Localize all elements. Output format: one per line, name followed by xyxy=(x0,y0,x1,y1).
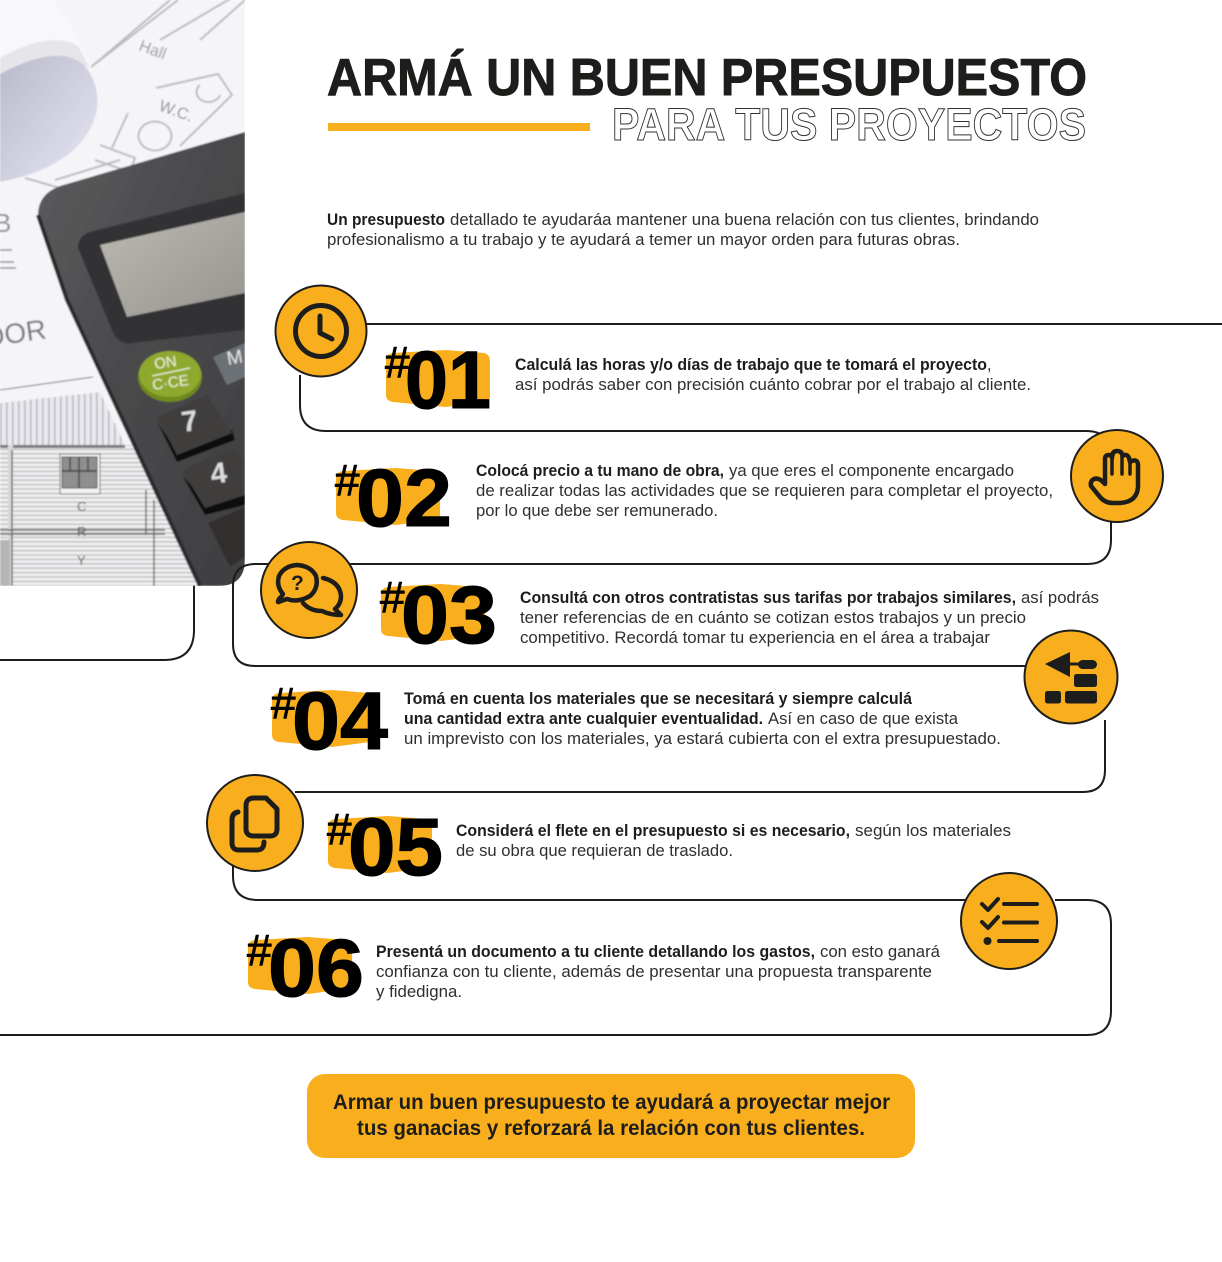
step 01 text xyxy=(515,356,1031,394)
step 04 text xyxy=(404,690,1001,748)
photo panel: calculator on blueprints: W.C. xyxy=(157,98,195,126)
connecting outline: step 06 box xyxy=(0,900,1111,1035)
number 03: 03 xyxy=(401,570,497,661)
step 06 xyxy=(247,873,1057,1014)
photo panel: calculator on blueprints: ON xyxy=(153,353,178,373)
step 05 text xyxy=(456,822,1011,860)
photo panel: calculator on blueprints: R xyxy=(77,524,86,539)
photo panel: calculator on blueprints: Y xyxy=(77,553,86,568)
step 06 text: confianza con tu cliente, además de presentar una propuesta transparente xyxy=(376,963,932,981)
connecting outline: step 01 box xyxy=(300,324,1222,437)
connecting outline: lower-left path behind the photo xyxy=(0,570,194,660)
number 01: # xyxy=(385,338,410,387)
photo panel: calculator on blueprints xyxy=(0,0,245,586)
step 06 text: y fidedigna. xyxy=(376,983,462,1001)
step 04 text: Así en caso de que exista xyxy=(768,710,959,728)
connecting outline: step 02 box xyxy=(233,520,1111,666)
callout: Armar un buen presupuesto te ayudará a proyectar mejor xyxy=(333,1091,890,1114)
step 02 text: Colocá precio a tu mano de obra, xyxy=(476,462,724,480)
icon: clock xyxy=(276,286,366,376)
step 02 text: por lo que debe ser remunerado. xyxy=(476,502,718,520)
step 02 xyxy=(335,430,1163,544)
step 05 text: según los materiales xyxy=(855,822,1011,840)
number 05: # xyxy=(327,805,352,854)
subtitle: PARA TUS PROYECTOS xyxy=(612,99,1086,150)
photo panel: calculator on blueprints: C xyxy=(77,499,86,514)
intro text: detallado te ayudaráa mantener una buena relación con tus clientes, brindando xyxy=(450,211,1039,229)
step 06 text xyxy=(376,943,941,1001)
number 04: 04 xyxy=(292,676,388,767)
step 06 text: Presentá un documento a tu cliente detallando los gastos, xyxy=(376,943,815,961)
photo panel: calculator on blueprints: 7 xyxy=(180,405,200,439)
step 06 text: con esto ganará xyxy=(820,943,941,961)
photo panel: calculator on blueprints: M xyxy=(225,346,244,370)
icon: documents xyxy=(207,775,303,871)
step 01 text: Calculá las horas y/o días de trabajo que te tomará el proyecto xyxy=(515,356,987,374)
icon: checklist xyxy=(961,873,1057,969)
number 05: 05 xyxy=(348,802,443,893)
step 04 xyxy=(271,630,1118,767)
step 03 text: competitivo. Recordá tomar tu experiencia en el área a trabajar xyxy=(520,629,991,647)
step 05 text: de su obra que requieran de traslado. xyxy=(456,842,733,860)
icon: chat bubbles: ? xyxy=(291,572,304,595)
photo panel: calculator on blueprints: 4 xyxy=(209,457,229,491)
number 03: # xyxy=(380,573,405,622)
intro text xyxy=(327,211,1039,249)
step 04 text: Tomá en cuenta los materiales que se necesitará y siempre calculá xyxy=(404,690,913,708)
number 04: # xyxy=(271,679,296,728)
number 02: 02 xyxy=(356,453,452,544)
step 03 text: tener referencias de en cuánto se cotizan estos trabajos y un precio xyxy=(520,609,1026,627)
number 06: 06 xyxy=(268,923,364,1014)
icon: hand xyxy=(1071,430,1163,522)
step 03 text: Consultá con otros contratistas sus tarifas por trabajos similares, xyxy=(520,589,1016,607)
step 03 text: así podrás xyxy=(1021,589,1099,607)
title accent bar xyxy=(328,123,590,131)
callout: tus ganacias y reforzará la relación con tus clientes. xyxy=(357,1117,865,1140)
icon: chat bubbles xyxy=(261,542,357,638)
intro text: profesionalismo a tu trabajo y te ayudará a temer un mayor orden para futuras obras. xyxy=(327,231,960,249)
number 01: 01 xyxy=(405,335,491,426)
step 01 text: , xyxy=(987,356,992,374)
step 01 xyxy=(276,286,1031,426)
number 06: # xyxy=(247,926,272,975)
number 02: # xyxy=(335,456,360,505)
step 03 text xyxy=(520,589,1099,647)
step 04 text: una cantidad extra ante cualquier eventualidad. xyxy=(404,710,763,728)
title: ARMÁ UN BUEN PRESUPUESTO xyxy=(327,49,1087,107)
step 02 text: de realizar todas las actividades que se requieren para completar el proyecto, xyxy=(476,482,1053,500)
step 04 text: un imprevisto con los materiales, ya estará cubierta con el extra presupuestado. xyxy=(404,730,1001,748)
connecting outline: step 05 box xyxy=(233,865,965,900)
step 05 xyxy=(207,775,1011,893)
callout xyxy=(307,1074,915,1158)
blueprint window xyxy=(60,454,100,494)
connecting outline: step 04 box xyxy=(295,720,1105,792)
step 01 text: así podrás saber con precisión cuánto cobrar por el trabajo al cliente. xyxy=(515,376,1031,394)
photo panel: calculator on blueprints: C·CE xyxy=(151,372,190,394)
step 02 text: ya que eres el componente encargado xyxy=(729,462,1014,480)
intro text: Un presupuesto xyxy=(327,211,445,229)
step 02 text xyxy=(476,462,1053,520)
step 05 text: Considerá el flete en el presupuesto si es necesario, xyxy=(456,822,850,840)
photo panel: calculator on blueprints: Hall xyxy=(137,38,168,63)
icon: trowel and bricks xyxy=(1024,630,1118,724)
step 03 xyxy=(261,542,1099,661)
